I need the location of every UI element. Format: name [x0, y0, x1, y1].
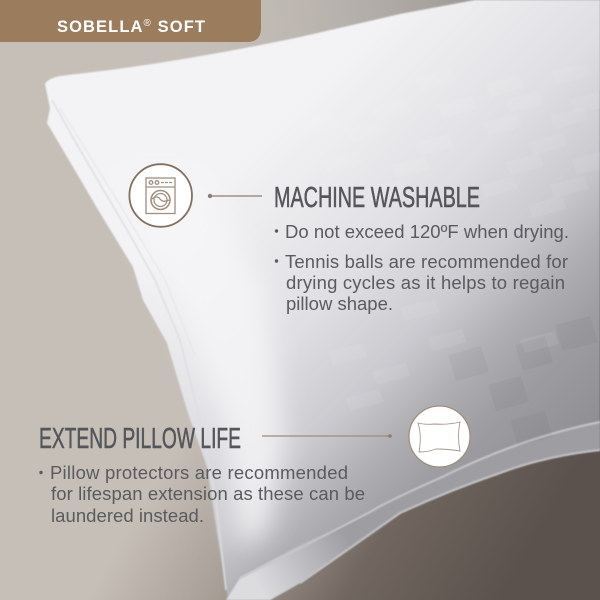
brand name: SOBELLA — [57, 18, 142, 36]
brand name: SOFT — [152, 18, 205, 36]
pillow quilt shadows — [448, 316, 598, 446]
brand name: ® — [144, 18, 152, 29]
text block: washing tips: Tennis balls are recommended for — [285, 251, 568, 272]
pillow seams — [52, 100, 600, 590]
pillow gusset flap — [226, 422, 600, 600]
icon: washing machine — [129, 164, 192, 227]
text block: pillow protectors: for lifespan extension as these can be — [51, 483, 365, 504]
connector: washing — [208, 194, 262, 198]
icon: pillow — [409, 406, 470, 467]
brand tag — [0, 0, 261, 42]
text block: pillow protectors — [39, 462, 365, 526]
heading: extend pillow life: EXTEND PILLOW LIFE — [39, 423, 241, 455]
pillow left highlight — [110, 170, 285, 550]
text block: pillow protectors: laundered instead. — [51, 505, 204, 526]
text block: washing tips: Do not exceed 120ºF when drying. — [285, 221, 569, 242]
text block: washing tips: drying cycles as it helps to regain — [286, 272, 565, 293]
text block: pillow protectors: Pillow protectors are recommended — [50, 462, 348, 483]
pillow checker pattern — [300, 63, 600, 411]
heading: machine washable: MACHINE WASHABLE — [274, 182, 480, 214]
text block: washing tips — [275, 221, 569, 314]
connector: pillow life — [262, 434, 392, 438]
text block: washing tips: pillow shape. — [286, 293, 393, 314]
